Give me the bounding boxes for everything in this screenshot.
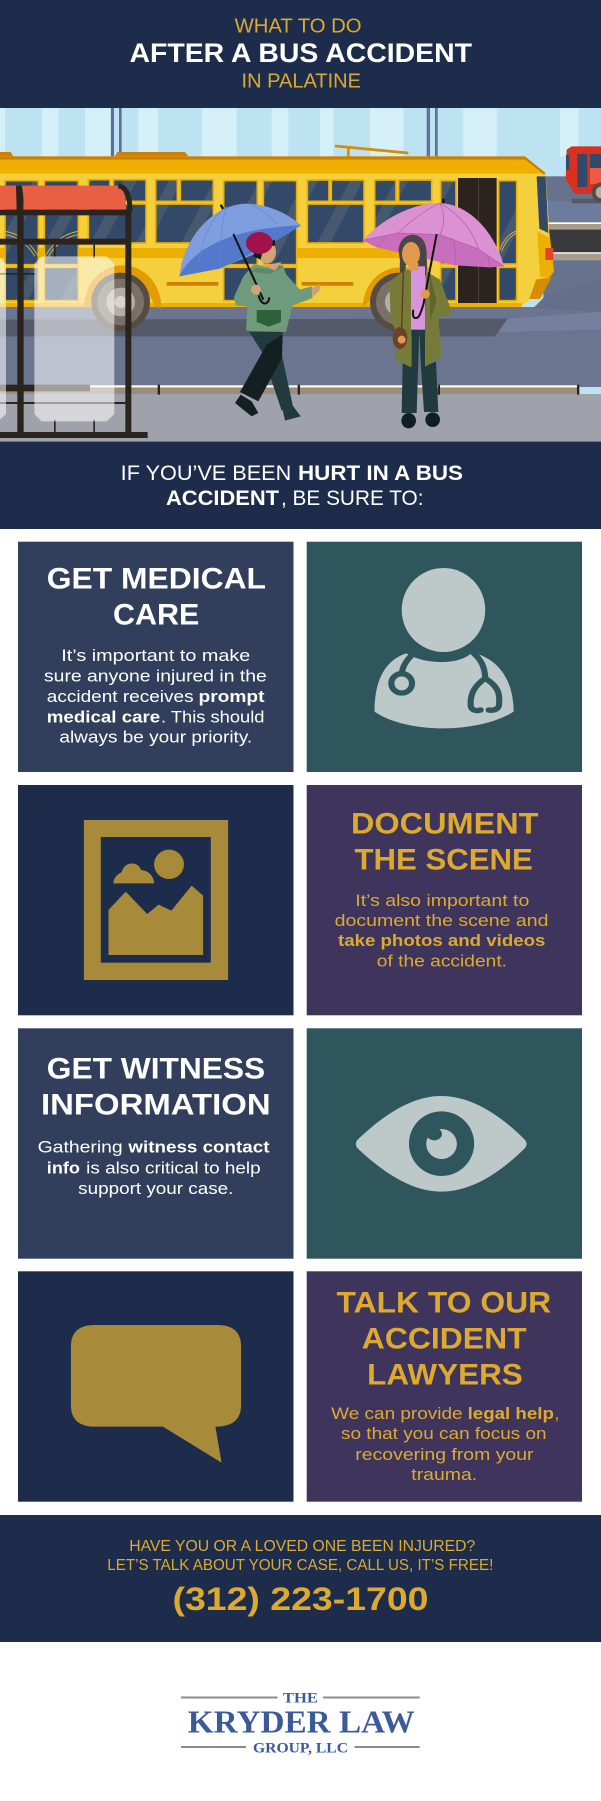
panel: talk to our accident lawyers <box>307 1271 582 1502</box>
heading: talk to our accident lawyers <box>336 1287 552 1392</box>
icon: eye <box>356 1096 527 1192</box>
body text: witness: witness contact <box>127 1138 270 1157</box>
panel: get witness information <box>18 1028 294 1259</box>
body text: medical care: medical care <box>47 708 160 727</box>
heading: document the scene: DOCUMENT <box>351 807 538 840</box>
logo: the kryder law group <box>181 1691 420 1756</box>
heading: talk to our accident lawyers: ACCIDENT <box>362 1323 527 1356</box>
person with blue umbrella <box>179 204 321 421</box>
heading: get witness information <box>41 1053 271 1122</box>
body text: lawyers: recovering from your <box>355 1445 534 1464</box>
heading: get witness information: GET WITNESS <box>47 1053 265 1086</box>
phone number: (312) 223-1700 <box>172 1581 428 1617</box>
body text: lawyers: trauma. <box>411 1465 477 1484</box>
body text: document the scene: of the accident. <box>377 952 507 971</box>
heading: document the scene: THE SCENE <box>354 843 533 876</box>
call to action text: HAVE YOU OR A LOVED ONE BEEN INJURED? <box>129 1538 475 1555</box>
body text: lawyers: , <box>554 1404 559 1423</box>
logo: the kryder law group: KRYDER LAW <box>188 1703 415 1739</box>
icon: doctor with stethoscope <box>374 568 514 728</box>
body text: document the scene <box>335 891 548 971</box>
body text: medical care: . This should <box>161 708 264 727</box>
intro text: ACCIDENT <box>166 487 279 510</box>
heading: talk to our accident lawyers: LAWYERS <box>367 1359 523 1392</box>
body text: witness <box>38 1138 270 1198</box>
title line: after a bus accident: AFTER A BUS ACCIDENT <box>130 38 472 68</box>
body text: medical care: It’s important to make <box>61 646 250 665</box>
panel: eye icon <box>307 1028 582 1259</box>
road <box>0 307 601 387</box>
body text: lawyers: so that you can focus on <box>341 1424 547 1443</box>
intro text: IF YOU’VE BEEN <box>121 462 291 485</box>
heading: get witness information: INFORMATION <box>41 1089 271 1122</box>
bus shelter <box>0 186 148 438</box>
icon: picture frame <box>84 820 228 980</box>
intro banner <box>0 442 601 529</box>
header banner <box>0 0 601 108</box>
body text: document the scene: It’s also important to <box>355 891 529 910</box>
title line: in palatine: IN PALATINE <box>242 71 361 93</box>
panel: document the scene <box>307 785 582 1015</box>
intro text: , BE SURE TO: <box>281 487 424 510</box>
body text: witness: is also critical to help <box>86 1158 261 1177</box>
intro text: HURT IN A BUS <box>298 462 463 485</box>
panel: speech bubble icon <box>18 1271 294 1502</box>
body text: document the scene: document the scene and <box>335 911 548 930</box>
heading: talk to our accident lawyers: TALK TO OUR <box>336 1287 552 1320</box>
body text: medical care: accident receives <box>47 687 194 706</box>
body text: medical care: sure anyone injured in the <box>44 667 267 686</box>
body text: witness: support your case. <box>78 1179 233 1198</box>
heading: get medical care <box>47 563 266 632</box>
heading: document the scene <box>351 807 538 876</box>
body text: medical care: prompt <box>198 687 265 706</box>
panel: doctor icon <box>307 542 582 772</box>
bus wheels <box>84 265 430 331</box>
body text: lawyers: legal help <box>468 1404 554 1423</box>
yellow trolley bus <box>0 146 554 307</box>
panel: get medical care <box>18 542 294 772</box>
body text: lawyers <box>331 1404 559 1484</box>
person with pink umbrella <box>363 199 504 428</box>
body text: witness: Gathering <box>38 1138 123 1157</box>
call to action text <box>107 1538 493 1574</box>
body text: document the scene: take photos and videos <box>338 931 545 950</box>
logo: the kryder law group: THE <box>283 1691 318 1707</box>
curb and sidewalk <box>0 385 601 441</box>
heading: get medical care: CARE <box>113 599 199 632</box>
icon: speech bubble <box>71 1325 241 1463</box>
title line: what to do: WHAT TO DO <box>235 15 362 37</box>
intro text <box>121 462 463 510</box>
body text: medical care: always be your priority. <box>59 728 252 747</box>
panel: photo icon <box>18 785 294 1015</box>
heading: get medical care: GET MEDICAL <box>47 563 266 596</box>
call to action banner <box>0 1515 601 1642</box>
body text: witness: info <box>47 1158 80 1177</box>
call to action text: LET’S TALK ABOUT YOUR CASE, CALL US, IT’S FREE! <box>107 1557 493 1574</box>
illustration: bus stop street scene <box>0 108 601 441</box>
logo: the kryder law group: GROUP, LLC <box>253 1740 348 1756</box>
red bus <box>566 146 601 203</box>
body text: medical care <box>44 646 267 747</box>
body text: lawyers: We can provide <box>331 1404 463 1423</box>
